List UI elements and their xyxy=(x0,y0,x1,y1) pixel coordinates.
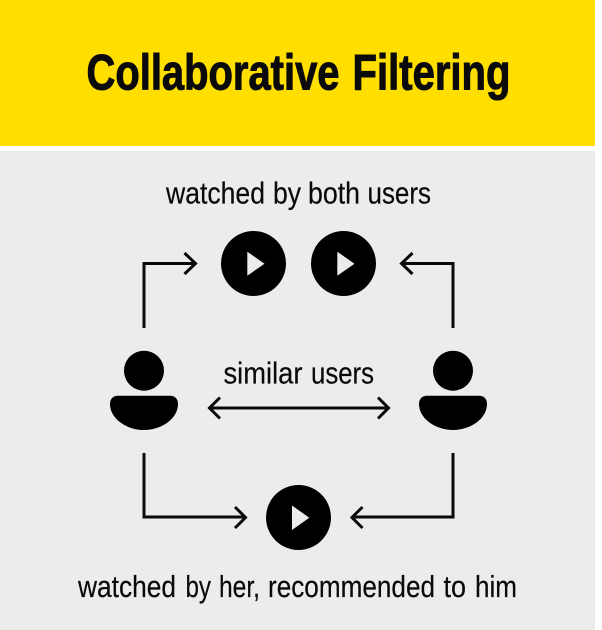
label: watched by her, recommended to him: to xyxy=(444,569,466,604)
label: watched by both users: both xyxy=(308,176,360,210)
icon: recommended play button xyxy=(266,485,331,550)
arrow: similarity between users xyxy=(210,398,388,418)
label: similar users: similar xyxy=(224,356,302,390)
label: watched by her, recommended to him xyxy=(77,569,517,604)
label: watched by both users: users xyxy=(368,176,431,210)
label: watched by both users: by xyxy=(273,176,301,210)
title: Filtering xyxy=(352,44,510,100)
arrow: left user to recommended video xyxy=(144,453,246,528)
icon: left user xyxy=(110,351,178,430)
label: watched by her, recommended to him: recommended xyxy=(268,569,435,604)
label: watched by her, recommended to him: watched xyxy=(77,569,176,604)
icon: play button right xyxy=(311,231,376,296)
arrow: left user to shared videos xyxy=(144,253,196,328)
label: watched by her, recommended to him: her, xyxy=(219,569,260,604)
label: similar users xyxy=(224,356,374,390)
label: watched by her, recommended to him: him xyxy=(475,569,517,604)
header panel xyxy=(0,0,595,146)
icon: right user xyxy=(419,351,487,430)
title: Collaborative xyxy=(86,44,340,100)
diagram panel xyxy=(0,151,595,630)
label: watched by her, recommended to him: by xyxy=(186,569,211,604)
arrow: right user to shared videos xyxy=(402,253,453,328)
label: similar users: users xyxy=(311,356,374,390)
icon: play button left xyxy=(221,231,286,296)
label: watched by both users: watched xyxy=(165,176,265,210)
arrow: right user to recommended video xyxy=(352,453,453,528)
label: watched by both users xyxy=(165,176,431,210)
